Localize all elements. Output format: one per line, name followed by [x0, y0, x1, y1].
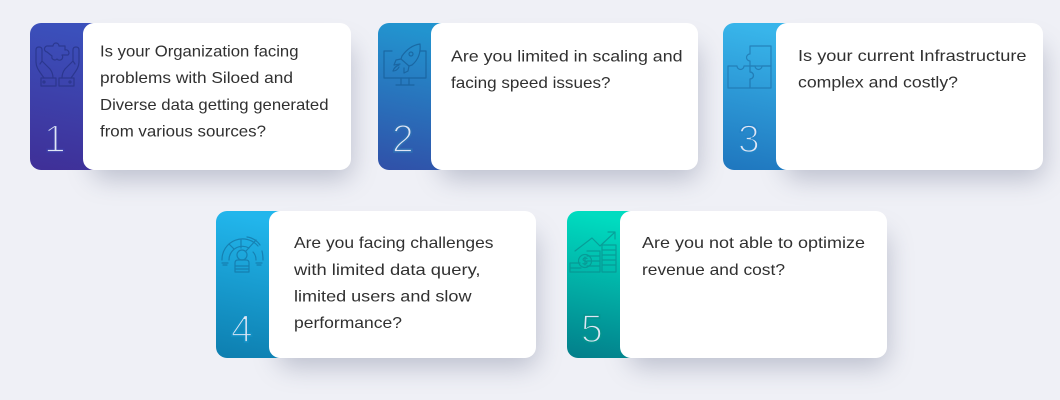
text: card 4 question: with limited data query,	[293, 262, 480, 279]
text: card 4 question: performance?	[294, 315, 402, 332]
icon: puzzle pieces	[728, 46, 771, 88]
text: card 5 question: revenue and cost?	[642, 262, 785, 279]
text: card 3 question: complex and costly?	[798, 74, 958, 92]
text: card 3 question: Is your current Infrastructure	[798, 48, 1026, 65]
panel: card 5	[567, 211, 888, 367]
number 4: 4	[231, 308, 253, 351]
number 2: 2	[392, 118, 414, 161]
text: card 1 question: from various sources?	[100, 124, 266, 140]
number 3: 3	[738, 118, 760, 161]
text: card 1 question: Diverse data getting generated	[100, 97, 328, 114]
text: card 2 question: facing speed issues?	[451, 75, 611, 92]
text: card 2 question: Are you limited in scaling and	[451, 48, 682, 66]
icon: hands holding puzzle piece	[36, 43, 79, 86]
text: card 4 question: Are you facing challenges	[294, 235, 494, 252]
panel: card 1	[30, 23, 352, 179]
text: card 5 question: Are you not able to optimize	[642, 235, 865, 252]
text: card 1 question: problems with Siloed and	[100, 70, 293, 87]
number 1: 1	[44, 118, 66, 161]
icon: rocket and monitor	[384, 44, 426, 85]
text: card 4 question: limited users and slow	[294, 288, 472, 306]
number 5: 5	[581, 308, 603, 351]
panel: card 2	[378, 23, 699, 179]
icon: performance gauge with user	[222, 237, 263, 272]
panel: card 3	[723, 23, 1044, 179]
panel: card 4	[216, 211, 537, 367]
text: card 1 question: Is your Organization facing	[100, 44, 298, 60]
icon: rising coins chart	[570, 232, 616, 272]
